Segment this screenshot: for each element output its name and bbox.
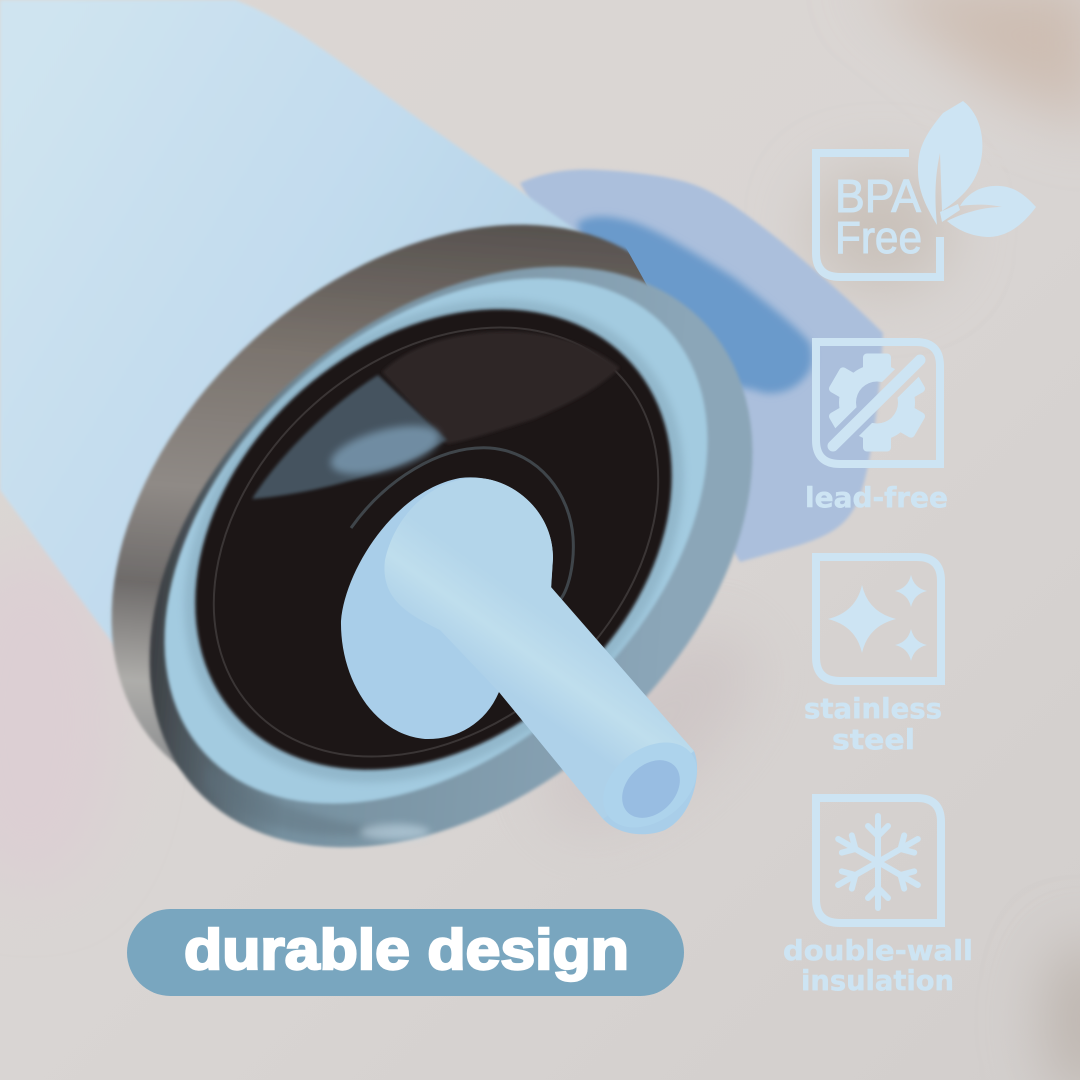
icon: double-wall insulation <box>783 798 973 997</box>
icon: stainless steel: stainless <box>804 692 942 725</box>
badge: durable design: durable design <box>184 918 629 982</box>
lid dark inner <box>103 215 764 864</box>
lid outer glass <box>36 150 866 964</box>
badge: durable design <box>127 909 684 996</box>
icon: stainless steel <box>804 557 942 756</box>
icon: double-wall insulation: double-wall <box>783 934 973 967</box>
metal rim <box>110 222 647 768</box>
icon: stainless steel: steel <box>832 723 915 756</box>
tumbler handle <box>520 170 883 562</box>
icon: BPA free <box>816 101 1036 277</box>
icon: double-wall insulation: insulation <box>801 964 954 997</box>
icon: BPA free: Free <box>835 212 922 263</box>
tumbler body <box>0 0 590 660</box>
icon: BPA free: BPA <box>835 170 921 222</box>
straw <box>341 477 713 845</box>
icon: lead-free: lead-free <box>805 481 948 514</box>
icon: lead-free <box>807 338 947 508</box>
